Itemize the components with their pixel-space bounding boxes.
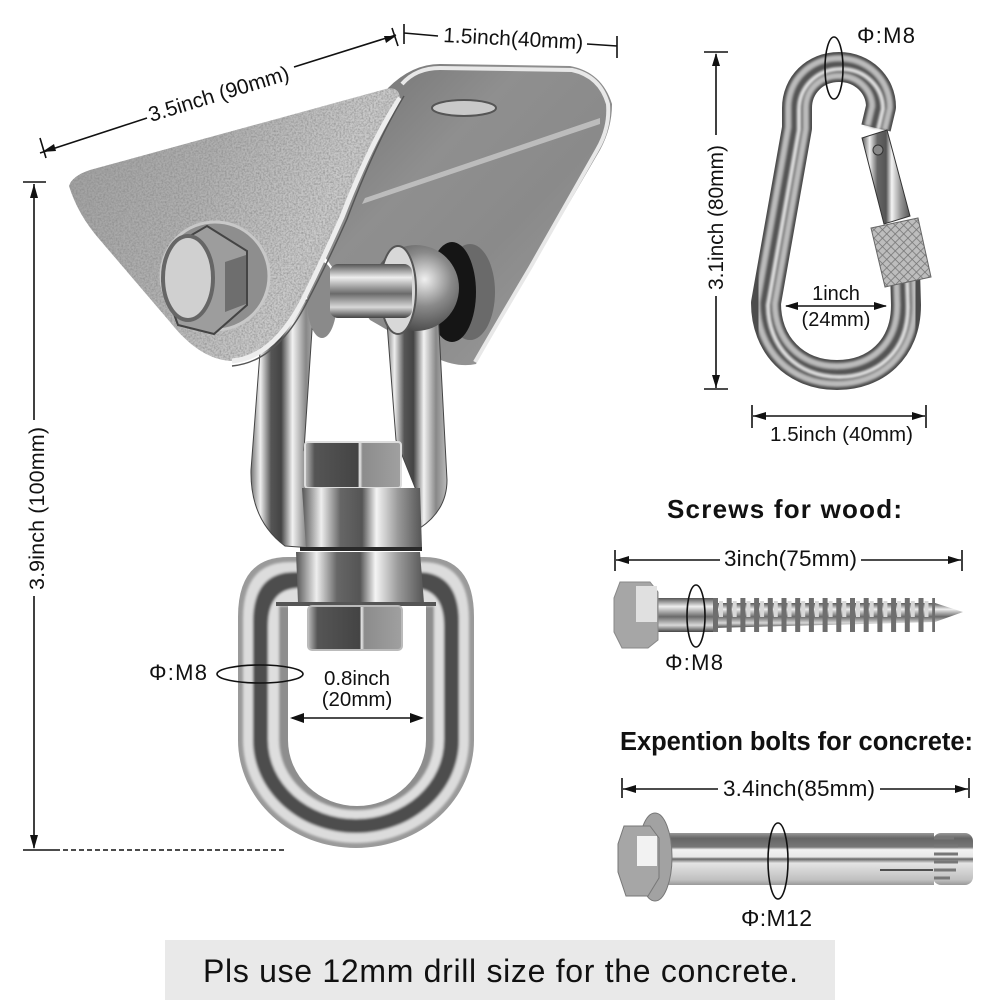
- bolt flange: [638, 813, 672, 901]
- dimension: bracket depth: 1.5inch(40mm): [443, 24, 584, 54]
- upper nut: [305, 442, 401, 488]
- label: carabiner inner width: (24mm): [802, 309, 870, 331]
- screw head: [614, 582, 658, 648]
- carabiner: [766, 67, 931, 377]
- bolt sleeve: [668, 833, 934, 885]
- dimension: screw length: [615, 546, 962, 571]
- label: bolt diameter: [741, 823, 812, 931]
- dimension: carabiner height: [704, 52, 728, 389]
- bolt head: [618, 826, 659, 896]
- carabiner body: [766, 67, 908, 377]
- eye of shackle: [373, 245, 459, 331]
- screw shank: [655, 598, 713, 632]
- dimension: bracket width: [40, 28, 398, 158]
- screw thread: [712, 603, 963, 628]
- dimension: carabiner height: 3.1inch (80mm): [705, 145, 728, 290]
- knurled sleeve: [871, 218, 931, 287]
- dimension: bolt length: 3.4inch(85mm): [723, 776, 875, 801]
- dimension: carabiner width: [752, 405, 926, 446]
- dimension: overall height: 3.9inch (100mm): [25, 427, 49, 590]
- label: screw diameter: [665, 585, 723, 675]
- U-shaped eye ring: [238, 557, 474, 848]
- label: carabiner inner width: [785, 283, 887, 331]
- label: ring inner width: [290, 667, 424, 723]
- dimension: overall height: [23, 182, 285, 850]
- swing hanger product: [69, 64, 612, 848]
- heading: expansion bolts: Expention bolts for concrete:: [620, 728, 973, 756]
- dimension: carabiner width: 1.5inch (40mm): [770, 423, 913, 446]
- label: carabiner wire diameter: Φ:M8: [857, 23, 915, 48]
- lower swivel collar: [296, 552, 424, 603]
- mounting hole: [432, 100, 496, 116]
- label: carabiner wire diameter: [825, 23, 915, 99]
- label: ring diameter: Φ:M8: [149, 660, 207, 685]
- carabiner gate: [862, 130, 910, 224]
- dimension: bolt length: [622, 776, 969, 801]
- front bracket plate: [69, 88, 400, 361]
- bolt knurled end: [933, 833, 973, 885]
- label: screw diameter: Φ:M8: [665, 650, 723, 675]
- label: ring diameter: [149, 660, 303, 685]
- dimension: screw length: 3inch(75mm): [724, 546, 857, 571]
- expansion bolt: [618, 813, 973, 901]
- swivel barrel: [302, 488, 422, 548]
- dimension: bracket depth: [404, 24, 617, 58]
- label: ring inner width: 0.8inch: [324, 667, 390, 690]
- footer note: Pls use 12mm drill size for the concrete.: [203, 953, 798, 989]
- hex bolt head: [161, 222, 269, 330]
- label: ring inner width: (20mm): [322, 688, 392, 711]
- footer note: [165, 940, 835, 1000]
- lower nut: [308, 606, 402, 650]
- label: bolt diameter: Φ:M12: [741, 905, 812, 931]
- pivot pin: [330, 264, 412, 318]
- lag screw: [614, 582, 963, 648]
- back mounting plate: [320, 64, 612, 365]
- dimension: bracket width: 3.5inch (90mm): [146, 62, 292, 127]
- heading: screws for wood: Screws for wood:: [667, 494, 902, 524]
- lower shackle arms: [251, 300, 318, 548]
- back bushing: [445, 244, 495, 340]
- label: carabiner inner width: 1inch: [812, 283, 860, 305]
